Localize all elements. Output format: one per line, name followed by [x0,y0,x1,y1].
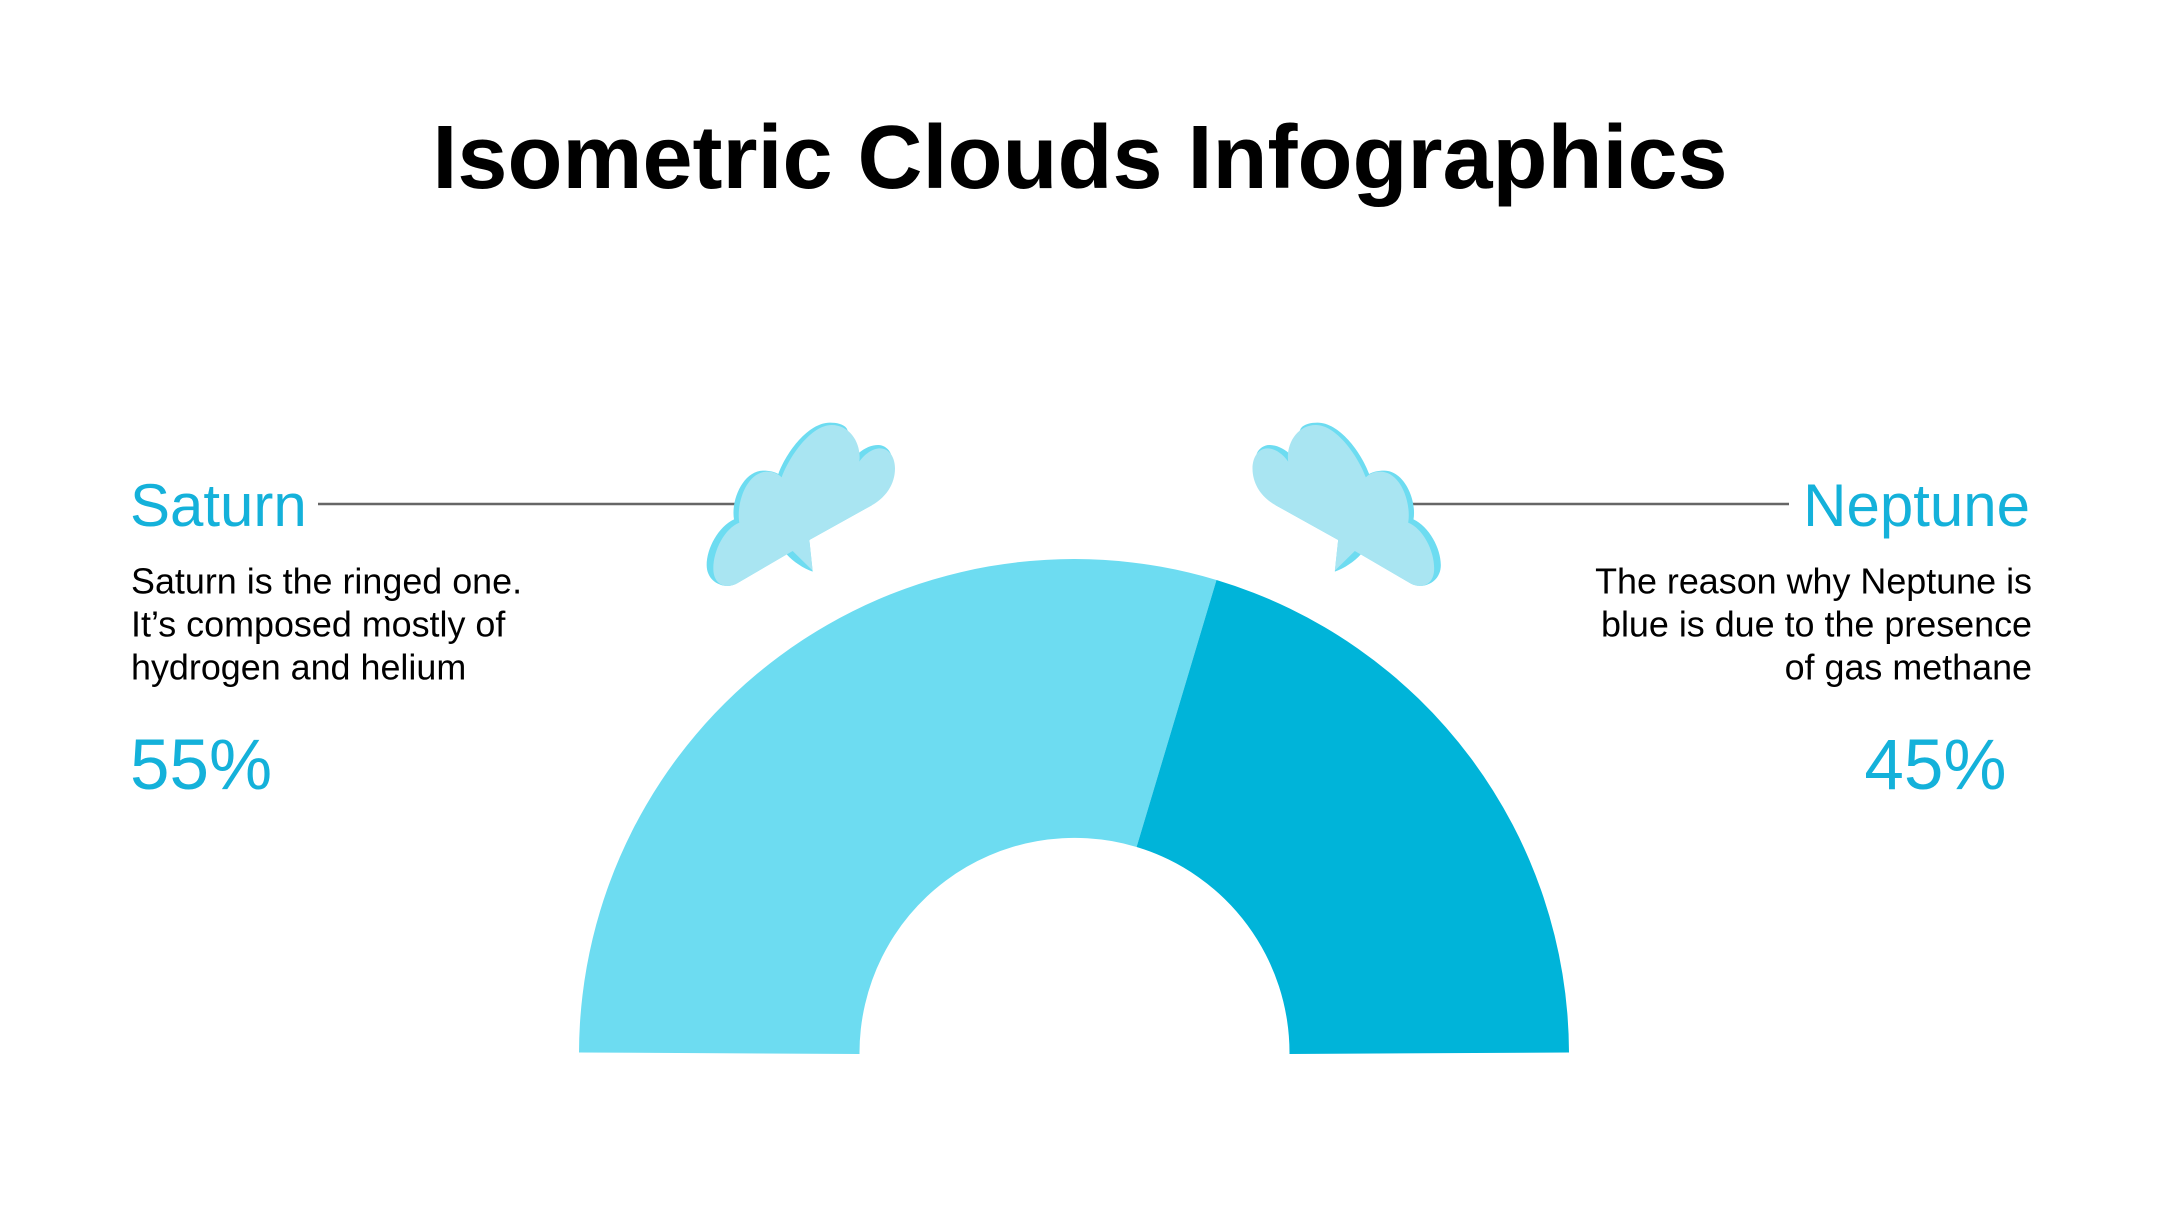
icon: isometric cloud right [1253,423,1441,586]
icon: isometric cloud left [707,423,895,586]
connector line: Saturn [318,503,740,505]
text block: Saturn description: hydrogen and helium [131,648,466,688]
text block: Saturn description: It’s composed mostly of [131,605,506,645]
segment: Neptune 45% [1137,580,1569,1054]
connector line: Neptune [1410,503,1789,505]
heading: Saturn: Saturn [130,472,307,539]
text block: Neptune description: of gas methane [1785,648,2032,688]
text block: Neptune description: The reason why Neptune is [1595,562,2032,602]
panel: Neptune [1595,472,2032,805]
text block: Saturn description: Saturn is the ringed one. [131,562,522,602]
title: Isometric Clouds Infographics [432,108,1728,208]
semicircle donut chart [579,559,1569,1054]
value: 45%: 45% [1864,726,2006,805]
text block: Neptune description: blue is due to the presence [1601,605,2032,645]
heading: Neptune: Neptune [1803,472,2030,539]
value: 55%: 55% [130,726,272,805]
segment: Saturn 55% [579,559,1216,1054]
panel: Saturn [130,472,522,805]
